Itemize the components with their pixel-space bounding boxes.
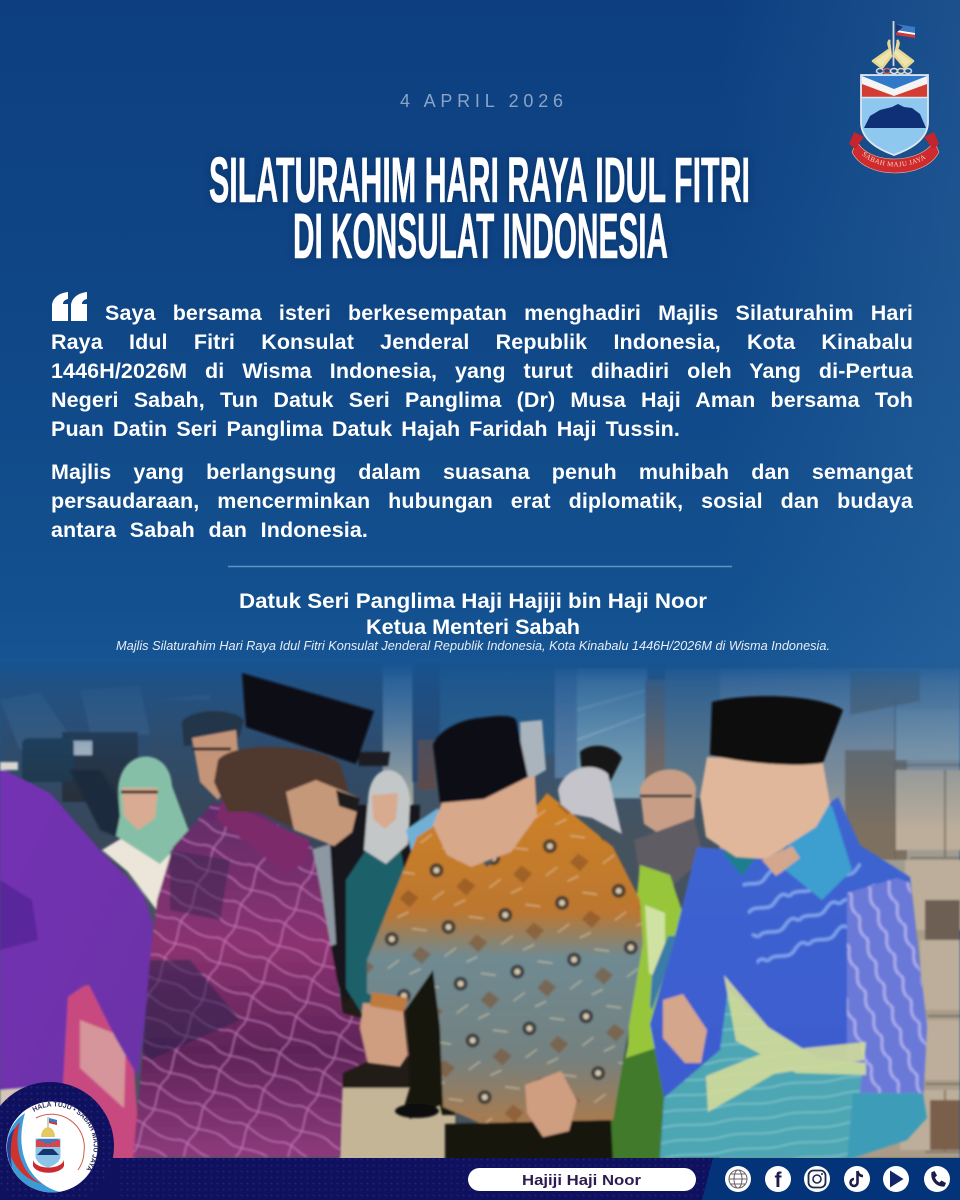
man in maroon batik shirt: [133, 673, 394, 1157]
background guest: man with glasses behind: [70, 711, 244, 850]
speaker name: Datuk Seri Panglima Haji Hajiji bin Haji Noor: [239, 590, 707, 613]
text: antara Sabah dan Indonesia.: [51, 518, 368, 542]
white name pill: [468, 1168, 696, 1191]
text: Majlis yang berlangsung dalam suasana penuh muhibah dan semangat: [51, 460, 913, 484]
emblem rings: [876, 68, 912, 74]
footer bar: [0, 1158, 960, 1200]
background guest: woman in mint hijab: [102, 756, 192, 912]
icon: opening quote mark: [52, 292, 87, 321]
text: Puan Datin Seri Panglima Datuk Hajah Faridah Haji Tussin.: [51, 417, 680, 441]
text: Saya bersama isteri berkesempatan menghadiri Majlis Silaturahim Hari: [105, 301, 913, 325]
photo backdrop fading into the blue background: [0, 662, 960, 1160]
photo caption: Majlis Silaturahim Hari Raya Idul Fitri Konsulat Jenderal Republik Indonesia, Kota Kinabalu 1446H/2026M di Wisma Indonesia.: [116, 639, 830, 653]
icon: facebook: [765, 1166, 791, 1192]
background guest: green outfit: [608, 864, 683, 1158]
black songkok: maroon shirt man: [242, 673, 374, 764]
small state emblem in logo: [33, 1117, 64, 1173]
man in blue batik shirt: [650, 696, 927, 1160]
emblem motto scroll: [849, 132, 940, 174]
emblem hands: [873, 40, 913, 68]
text: 1446H/2026M di Wisma Indonesia, yang turut dihadiri oleh Yang di-Pertua: [51, 359, 913, 383]
emblem flag and pole: [894, 21, 915, 66]
icon: youtube play: [883, 1166, 909, 1192]
woman in purple veil: [0, 762, 153, 1162]
title: [209, 144, 750, 272]
emblem motto scroll: SABAH MAJU JAYA: [862, 152, 926, 166]
man in orange batik shirt: [360, 716, 643, 1160]
background guests: woman with white hijab and man with glasses: [520, 720, 704, 888]
date: 4 APRIL 2026: [400, 91, 566, 111]
black songkok: orange shirt man: [433, 716, 528, 803]
icon: phone: [924, 1166, 950, 1192]
quote body text: [51, 301, 913, 542]
background guest: woman in grey hijab and teal dress: [310, 752, 420, 1018]
round campaign logo: [0, 1082, 114, 1196]
emblem shield: [861, 75, 928, 155]
pill label: Hajiji Haji Noor: [522, 1173, 641, 1189]
icon: facebook: f: [774, 1169, 782, 1192]
icon: tiktok: [844, 1166, 870, 1192]
background guests: man in dark trousers: [395, 808, 456, 1119]
photo subjects: [0, 673, 927, 1165]
black songkok: blue shirt man: [710, 696, 843, 765]
text: persaudaraan, mencerminkan hubungan erat diplomatik, sosial dan budaya: [51, 489, 913, 513]
text: Negeri Sabah, Tun Datuk Seri Panglima (Dr) Musa Haji Aman bersama Toh: [51, 388, 913, 412]
icon: website globe: [725, 1166, 751, 1192]
Sabah state emblem: [849, 21, 940, 174]
logo ring text: HALA TUJU • SABAH MAJU JAYA: [32, 1102, 98, 1170]
event photo: three leaders greeting: [0, 662, 960, 1165]
speaker role: Ketua Menteri Sabah: [366, 616, 580, 639]
divider: [228, 566, 732, 568]
icon: instagram: [804, 1166, 830, 1192]
text: Raya Idul Fitri Konsulat Jenderal Republik Indonesia, Kota Kinabalu: [51, 330, 913, 354]
